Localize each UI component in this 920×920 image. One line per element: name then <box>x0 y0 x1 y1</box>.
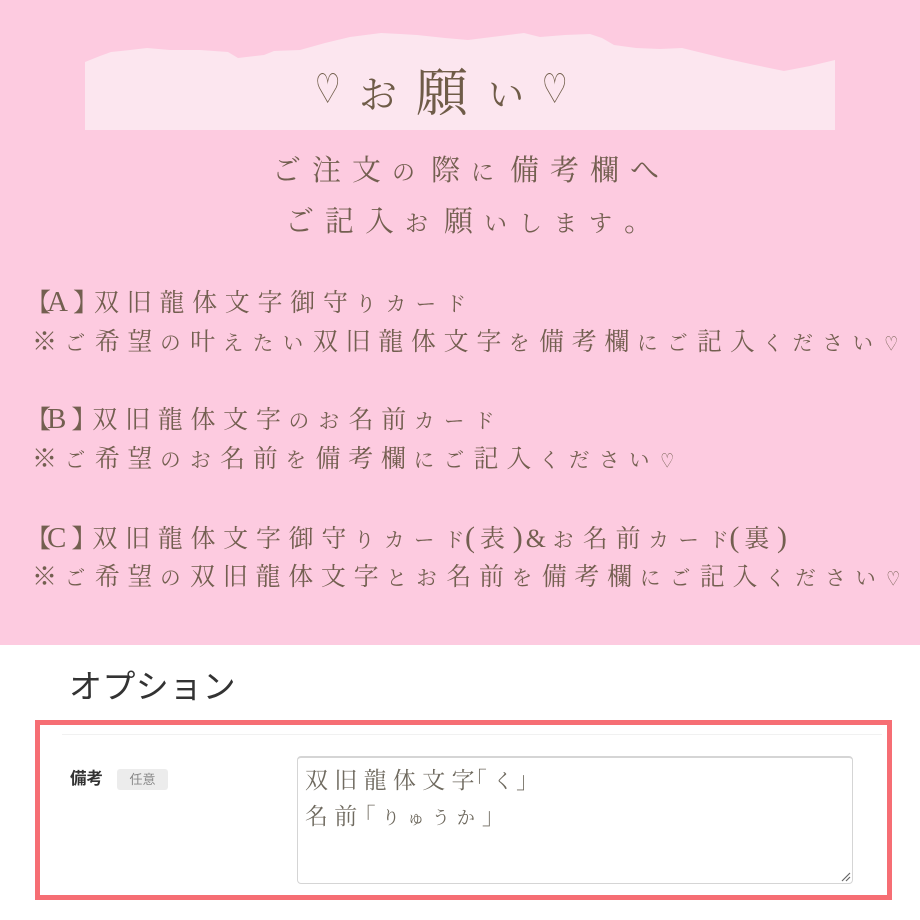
optional badge: 任意 <box>129 772 156 787</box>
option C note: ♡ <box>886 568 900 591</box>
resize handle <box>842 872 850 882</box>
title character o: お <box>359 64 397 119</box>
optional badge <box>117 769 168 790</box>
red highlight frame <box>35 720 892 900</box>
text area line 1: 双旧龍体文字「く」 <box>305 762 545 795</box>
text area line 2: 名前「りゅうか」 <box>305 798 511 831</box>
field label: 備考 <box>70 770 103 788</box>
option B note: ♡ <box>660 450 674 473</box>
option A note: ♡ <box>884 333 897 356</box>
title character negai: 願 <box>416 51 468 126</box>
panel: pink request background <box>0 0 920 645</box>
divider line <box>62 734 882 735</box>
title heart right: ♡ <box>542 64 568 113</box>
option B heading: 【B】双旧龍体文字のお名前カード <box>26 400 504 436</box>
option A note: ※ご希望の叶えたい双旧龍体文字を備考欄にご記入ください <box>32 322 883 358</box>
intro line 2: ご記入お願いします。 <box>285 199 664 240</box>
heading: options: オプション <box>69 668 236 705</box>
option C note: ※ご希望の双旧龍体文字とお名前を備考欄にご記入ください <box>32 557 885 593</box>
title heart left: ♡ <box>315 64 341 113</box>
option B note: ※ご希望のお名前を備考欄にご記入ください <box>32 439 659 475</box>
title character i: い <box>488 67 524 118</box>
text area <box>297 756 853 884</box>
option C heading: 【C】双旧龍体文字御守りカード(表)&お名前カード(裏) <box>26 519 792 555</box>
title <box>315 51 568 126</box>
intro line 1: ご注文の際に備考欄へ <box>272 148 670 189</box>
torn paper title banner <box>85 33 835 130</box>
option A heading: 【A】双旧龍体文字御守りカード <box>26 283 476 319</box>
